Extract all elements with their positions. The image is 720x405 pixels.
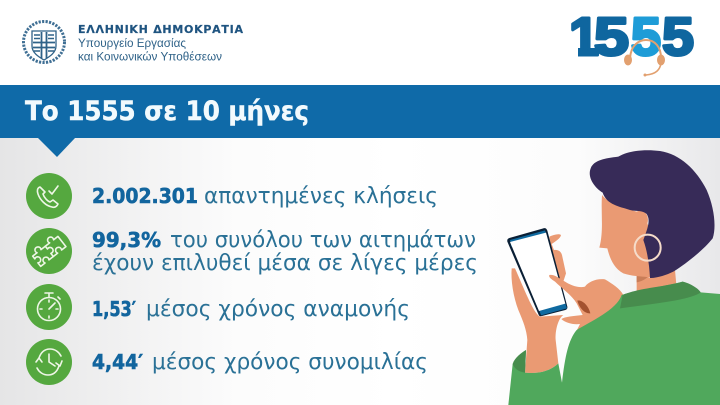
stat 1: answered calls: 2.002.301 xyxy=(92,184,198,208)
left arm holding phone xyxy=(511,268,563,373)
logo: 1555: 1 xyxy=(569,7,599,67)
icon: clock with arrows xyxy=(36,349,62,375)
neck xyxy=(637,270,677,295)
illustration: woman using phone xyxy=(507,150,720,405)
stat 3: waiting time: 1,53′ xyxy=(92,297,136,321)
icon: headset xyxy=(624,40,665,76)
icon: puzzle pieces xyxy=(30,233,66,266)
stat 2: requests resolved: του συνόλου των αιτημάτων xyxy=(170,228,476,253)
hair xyxy=(590,150,715,278)
logo: 1555: 5 xyxy=(662,7,694,67)
title: Το 1555 σε 10 μήνες xyxy=(25,96,309,127)
stat 4: talk time: μέσος χρόνος συνομιλίας xyxy=(152,350,428,375)
far-hand fingers xyxy=(549,234,566,287)
icon: phone with check xyxy=(37,186,58,207)
ministry name: Υπουργείο Εργασίας xyxy=(78,36,186,50)
stat 3: waiting time: μέσος χρόνος αναμονής xyxy=(146,297,410,322)
earring xyxy=(635,235,661,261)
stat 3: waiting time xyxy=(26,284,410,330)
sleeve shadow xyxy=(513,350,526,373)
stat 4: talk time: 4,44′ xyxy=(92,350,143,374)
ministry name xyxy=(78,23,243,64)
logo: 1555: 5 xyxy=(594,7,629,67)
stat 1: answered calls xyxy=(26,173,438,219)
phone xyxy=(507,228,567,316)
ministry name: ΕΛΛΗΝΙΚΗ ΔΗΜΟΚΡΑΤΙΑ xyxy=(78,23,243,36)
face xyxy=(599,195,653,277)
stat 4: talk time xyxy=(26,339,428,385)
green jacket xyxy=(508,282,720,405)
logo: 1555: 5 xyxy=(631,7,661,67)
palm shadow xyxy=(577,300,590,313)
pointing hand xyxy=(549,275,623,331)
stat 2: requests resolved: έχουν επιλυθεί μέσα σε λίγες μέρες xyxy=(92,251,478,276)
icon: stopwatch xyxy=(38,293,60,320)
stat 2: requests resolved xyxy=(26,228,478,276)
stat 2: requests resolved: 99,3% xyxy=(92,228,161,252)
stat 1: answered calls: απαντημένες κλήσεις xyxy=(204,184,438,209)
logo: 1555 xyxy=(571,16,694,76)
ministry name: και Κοινωνικών Υποθέσεων xyxy=(78,50,222,64)
emblem xyxy=(24,22,64,62)
collar shadow xyxy=(620,282,701,308)
title banner xyxy=(0,85,720,157)
